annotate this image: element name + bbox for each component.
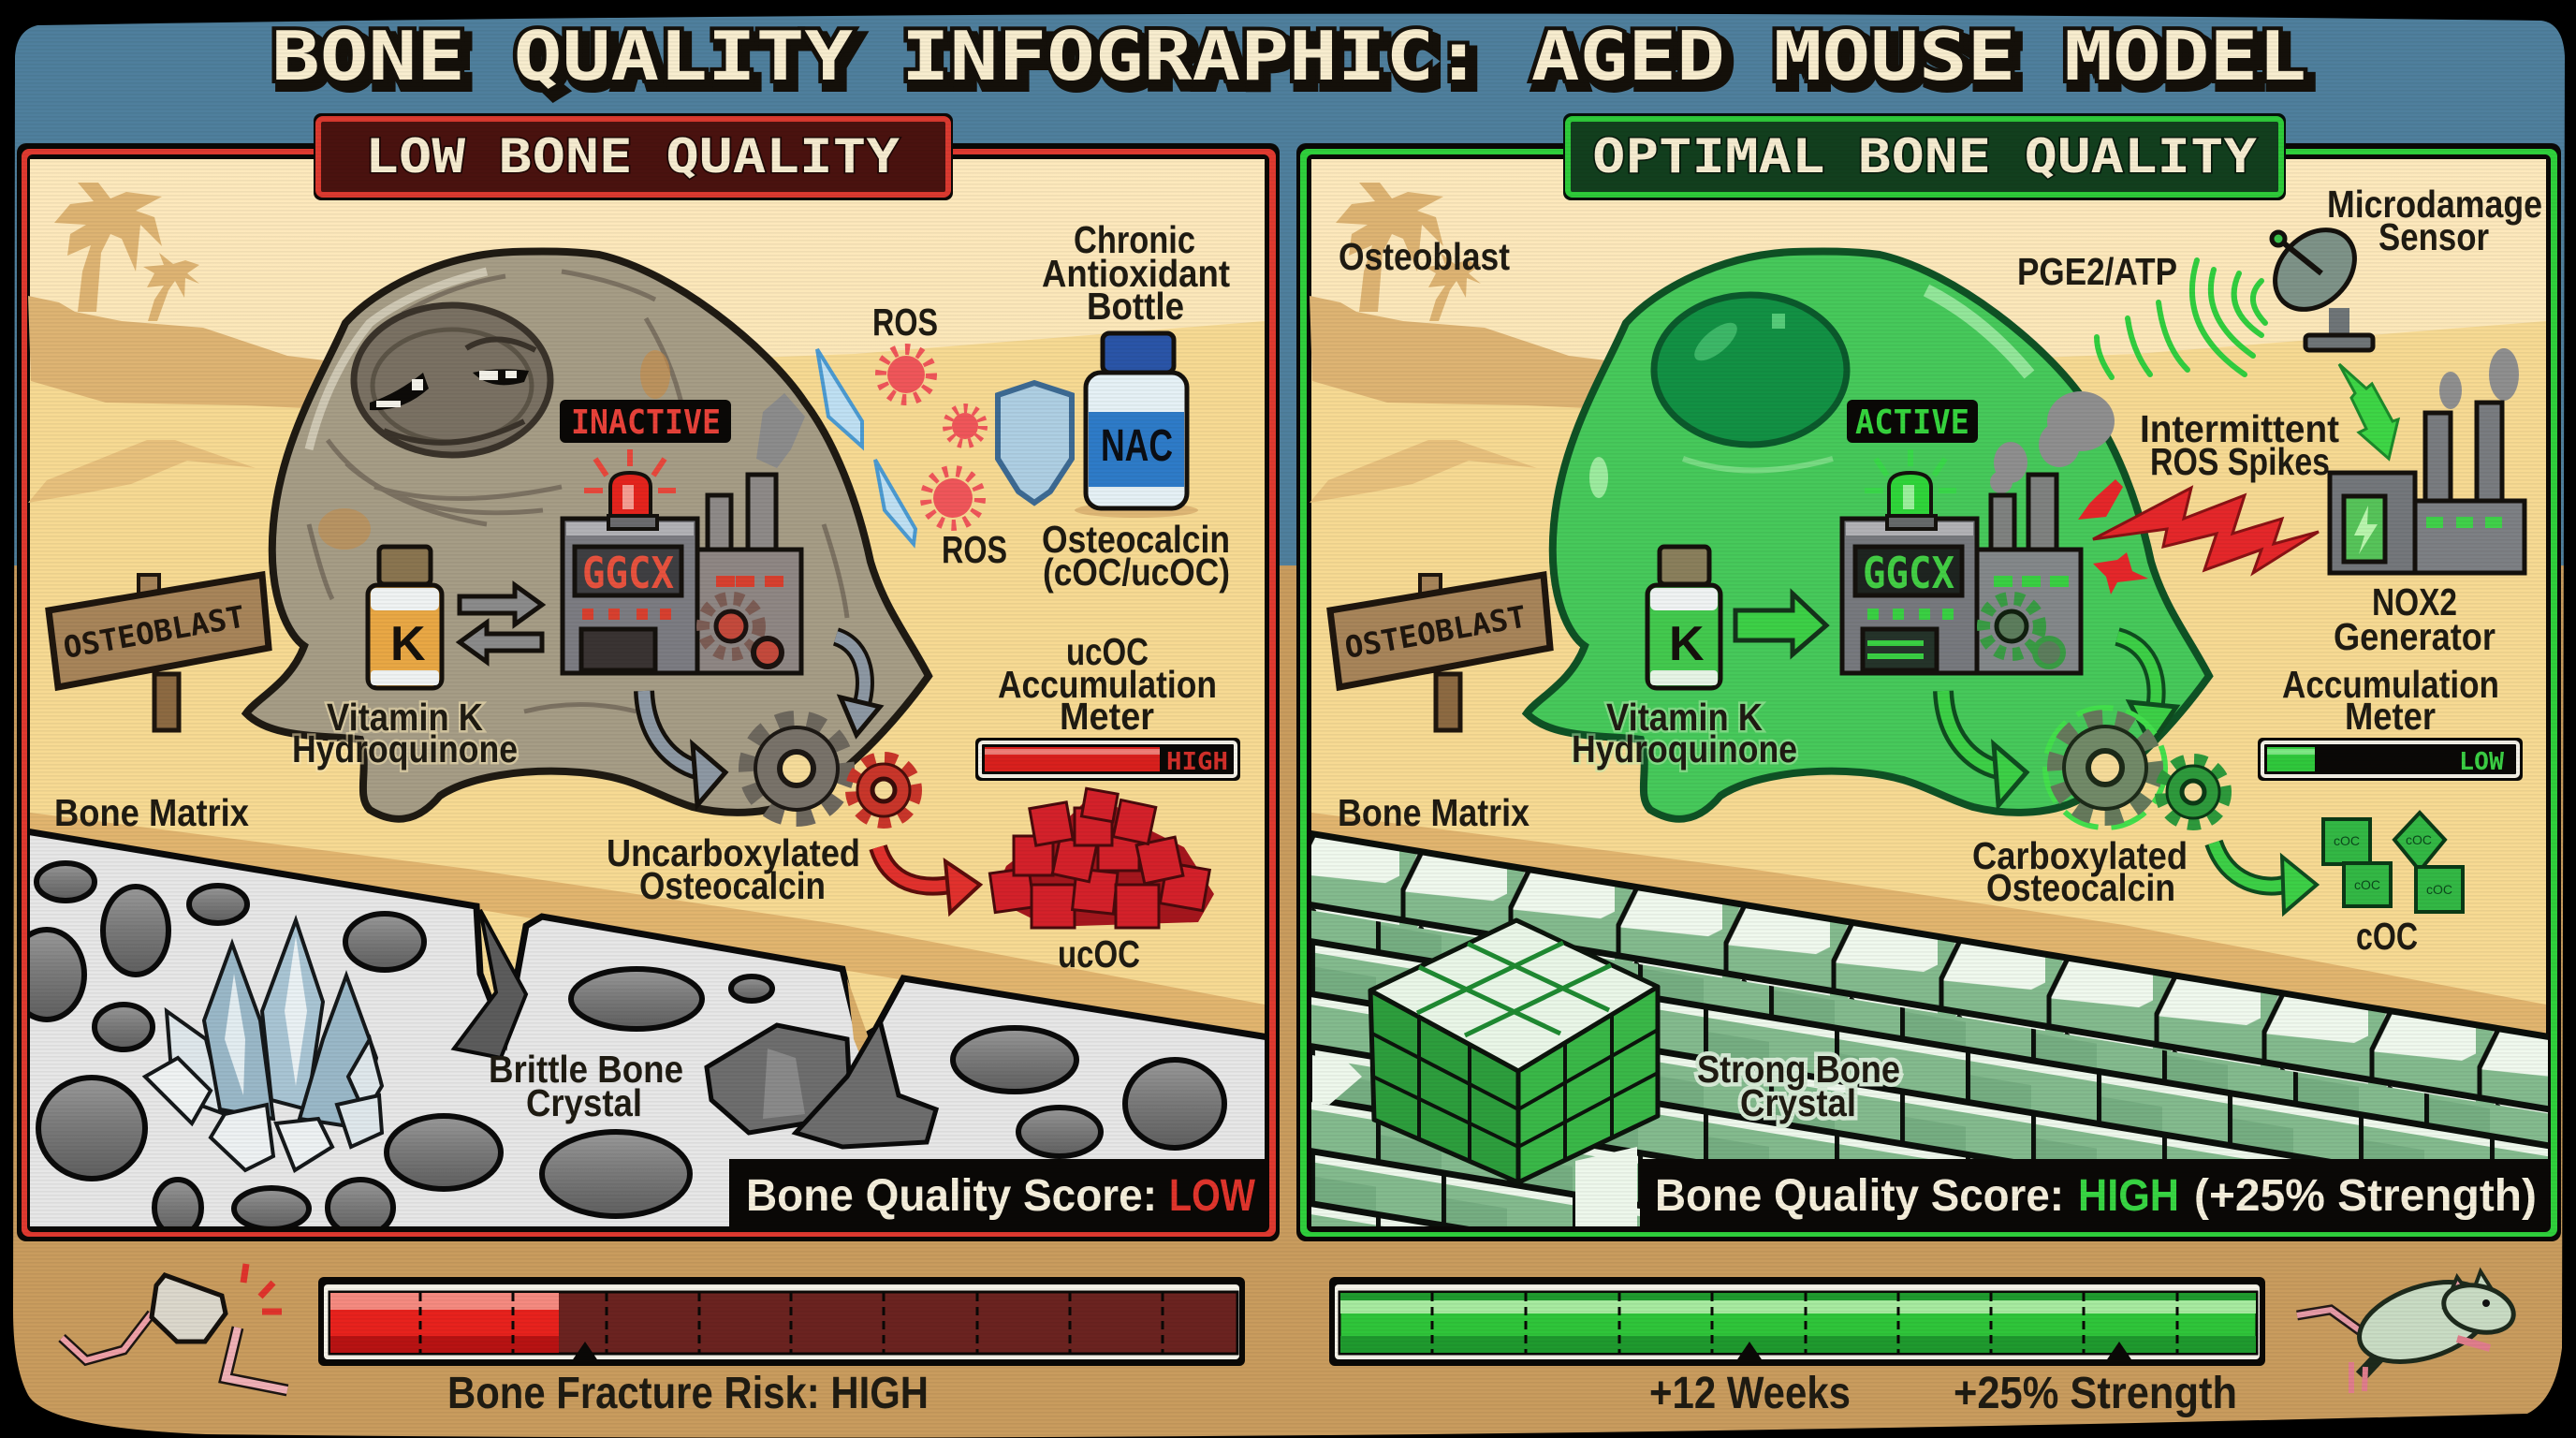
icon: smoke right xyxy=(1990,391,2115,493)
label: ucOC accumulation meter: Meter xyxy=(1060,695,1154,738)
title: BONE QUALITY INFOGRAPHIC: AGED MOUSE MODEL xyxy=(271,17,2306,95)
score box: high: HIGH xyxy=(2078,1171,2179,1221)
icon: NAC bottle: NAC xyxy=(1101,421,1173,471)
sign: osteoblast xyxy=(49,575,269,730)
score box: high: (+25% Strength) xyxy=(2194,1171,2537,1221)
icon: fractured mouse xyxy=(62,1264,287,1390)
icon: satellite dish xyxy=(2260,214,2373,350)
icon: smoke xyxy=(756,393,805,468)
icon: NAC bottle xyxy=(1075,333,1198,518)
label: NOX2 generator: Generator xyxy=(2334,615,2496,658)
label: chronic antioxidant bottle xyxy=(1042,218,1230,328)
badge: inactive: INACTIVE xyxy=(571,404,721,442)
icon: signal waves xyxy=(2097,260,2265,377)
icon: factory GGCX inactive xyxy=(563,475,801,673)
desert background xyxy=(28,159,1265,1226)
label: osteocalcin: (cOC/ucOC) xyxy=(1043,550,1230,594)
score box: low xyxy=(729,1159,1266,1228)
icon: vitamin K bottle green: K xyxy=(1669,617,1705,671)
panel tag: low bone quality: LOW BONE QUALITY xyxy=(365,129,900,183)
bar: fracture risk xyxy=(318,1277,1245,1366)
label: carboxylated osteocalcin: Osteocalcin xyxy=(1986,866,2175,909)
icon: NOX2 smoke xyxy=(2439,348,2519,409)
icon: green siren xyxy=(1865,449,1956,529)
meter: ucOC high xyxy=(975,738,1240,781)
icon: red ROS zigzag xyxy=(2078,479,2319,594)
cell: active osteoblast blob xyxy=(1527,251,2209,819)
score box: high: Bone Quality Score: xyxy=(1655,1171,2064,1221)
panel: low bone quality xyxy=(9,143,1280,1241)
label: plus 25 percent strength: +25% Strength xyxy=(1954,1369,2237,1418)
label: cOC: cOC xyxy=(2356,915,2418,958)
panel tag: optimal bone quality xyxy=(1563,113,2286,200)
bar: strength xyxy=(1329,1277,2265,1366)
badge: active: ACTIVE xyxy=(1855,404,1969,442)
icon: cOC cubes: cOC xyxy=(2354,877,2380,892)
label: brittle bone crystal: Crystal xyxy=(526,1081,642,1124)
arrow: green to cOC xyxy=(2214,843,2317,913)
nucleus xyxy=(1654,295,1847,445)
label: microdamage sensor: Microdamage xyxy=(2327,183,2542,226)
label: NOX2 generator xyxy=(2334,580,2496,658)
sign: osteoblast right xyxy=(1330,575,1550,730)
arrows: blocked exchange xyxy=(460,585,542,662)
bone matrix: brittle xyxy=(9,831,1268,1236)
label: intermittent ROS spikes: Intermittent xyxy=(2140,407,2339,450)
arrow: red xyxy=(878,847,980,913)
label: ROS lower: ROS xyxy=(942,528,1007,571)
label: NOX2 generator: NOX2 xyxy=(2372,580,2457,624)
label: vitamin K: Hydroquinone xyxy=(292,727,518,770)
icon: grey and red gears xyxy=(748,720,915,822)
sign: osteoblast: OSTEOBLAST xyxy=(61,598,247,666)
label: microdamage sensor xyxy=(2327,183,2542,258)
label: chronic antioxidant bottle: Antioxidant xyxy=(1042,252,1230,295)
icon: brittle bone crystal xyxy=(145,920,382,1170)
label: chronic antioxidant bottle: Bottle xyxy=(1087,285,1184,328)
label: bone matrix left: Bone Matrix xyxy=(54,791,249,834)
sign: osteoblast right: OSTEOBLAST xyxy=(1342,598,1529,666)
icon: healthy mouse xyxy=(2297,1268,2519,1393)
icon: vitamin K bottle orange: K xyxy=(390,617,426,671)
score box: low: LOW xyxy=(1169,1171,1256,1221)
score box: high xyxy=(1640,1159,2550,1228)
label: uncarboxylated osteocalcin xyxy=(607,831,860,907)
label: uncarboxylated osteocalcin: Uncarboxylated xyxy=(607,831,860,874)
label: brittle bone crystal xyxy=(489,1048,683,1124)
label: brittle bone crystal: Brittle Bone xyxy=(489,1048,683,1091)
icon: strong bone crystal cube xyxy=(1370,920,1658,1182)
label: plus 12 weeks: +12 Weeks xyxy=(1649,1369,1851,1418)
nucleus with sad eyes xyxy=(354,305,550,455)
label: vitamin K xyxy=(292,696,518,770)
label: uncarboxylated osteocalcin: Osteocalcin xyxy=(639,864,826,907)
label: ucOC accumulation meter xyxy=(998,630,1217,738)
label: ucOC accumulation meter: Accumulation xyxy=(998,663,1217,706)
label: vitamin K right: Hydroquinone xyxy=(1572,727,1797,770)
label: intermittent ROS spikes: ROS Spikes xyxy=(2150,440,2330,483)
label: GGCX green: GGCX xyxy=(1863,548,1954,598)
cell: low osteoblast blob xyxy=(246,251,929,819)
icons: ROS stars and cracked shields xyxy=(817,349,983,544)
label: strong bone crystal xyxy=(1697,1048,1900,1124)
icon: cOC cubes: cOC xyxy=(2406,832,2432,847)
label: accumulation meter: Meter xyxy=(2345,695,2436,738)
icon: green lightning xyxy=(2339,364,2398,459)
icon: shield xyxy=(998,383,1072,503)
icon: NOX2 factory xyxy=(2330,403,2525,573)
label: vitamin K: Vitamin K xyxy=(327,696,483,739)
label: carboxylated osteocalcin: Carboxylated xyxy=(1972,834,2188,877)
label: chronic antioxidant bottle: Chronic xyxy=(1074,218,1195,261)
label: accumulation meter: Accumulation xyxy=(2282,663,2499,706)
arrows: green curved xyxy=(1943,637,2176,805)
label: strong bone crystal: Crystal xyxy=(1740,1081,1856,1124)
score box: low: Bone Quality Score: xyxy=(746,1171,1157,1221)
label: accumulation meter xyxy=(2282,663,2499,738)
bone shards at crack xyxy=(707,1020,936,1147)
meter: low xyxy=(2258,738,2523,781)
icon: green gears xyxy=(2045,708,2225,828)
label: GGCX red: GGCX xyxy=(582,548,674,598)
label: fracture risk: Bone Fracture Risk: HIGH xyxy=(447,1369,929,1418)
label: ROS upper: ROS xyxy=(872,301,938,344)
icon: ucOC cube pile xyxy=(989,788,1214,928)
label: carboxylated osteocalcin xyxy=(1972,834,2188,909)
label: vitamin K right: Vitamin K xyxy=(1606,696,1763,739)
arrow: green forward xyxy=(1735,594,1826,654)
panel: optimal bone quality xyxy=(1296,143,2561,1241)
icon: factory GGCX active xyxy=(1842,475,2081,673)
label: vitamin K right xyxy=(1572,696,1797,770)
desert background right xyxy=(1310,159,2546,1226)
icon: vitamin K bottle green xyxy=(1647,547,1720,688)
title: BONE QUALITY INFOGRAPHIC: AGED MOUSE MODEL xyxy=(277,23,2312,102)
icon: cOC cubes: cOC xyxy=(2334,833,2360,848)
panel tag: low bone quality xyxy=(314,113,953,200)
icon: red siren xyxy=(584,449,676,529)
panel tag: optimal bone quality: OPTIMAL BONE QUALITY xyxy=(1592,129,2257,183)
label: ucOC accumulation meter: ucOC xyxy=(1066,630,1149,673)
label: microdamage sensor: Sensor xyxy=(2378,215,2489,258)
icon: cOC cubes: cOC xyxy=(2426,882,2452,897)
label: osteocalcin xyxy=(1042,518,1230,594)
arrows: grey curved xyxy=(644,637,880,805)
icon: vitamin K bottle orange xyxy=(368,547,442,688)
label: osteocalcin: Osteocalcin xyxy=(1042,518,1230,561)
icon: broken gears in factory xyxy=(703,598,782,667)
label: osteoblast: Osteoblast xyxy=(1339,235,1510,278)
bone matrix: strong brick wall xyxy=(1309,833,2552,1231)
label: intermittent ROS spikes xyxy=(2140,407,2339,483)
label: bone matrix right: Bone Matrix xyxy=(1338,791,1530,834)
icon: cOC cubes xyxy=(2323,813,2463,912)
label: ucOC: ucOC xyxy=(1058,932,1140,976)
icon: green gears in factory xyxy=(1983,598,2063,667)
meter: ucOC high: HIGH xyxy=(1166,748,1228,776)
meter: low: LOW xyxy=(2459,748,2504,776)
label: strong bone crystal: Strong Bone xyxy=(1697,1048,1900,1091)
label: PGE2/ATP: PGE2/ATP xyxy=(2017,250,2177,293)
